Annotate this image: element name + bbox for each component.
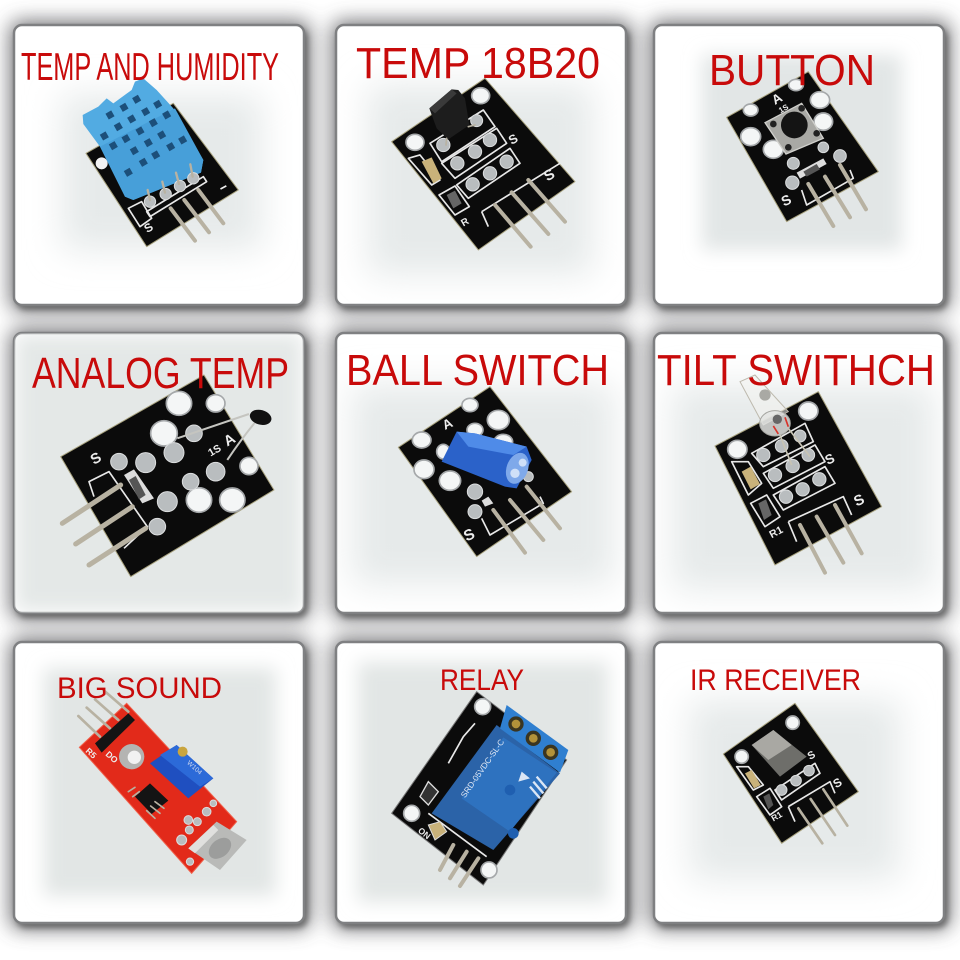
- panel: ball switch: [336, 333, 626, 613]
- module: 18B20 board: S: [541, 166, 558, 185]
- module: IR receiver board: S: [830, 775, 844, 791]
- panel: IR receiver: [654, 642, 944, 923]
- label: temp and humidity: TEMP AND HUMIDITY: [21, 46, 279, 89]
- module: ball switch board: A: [440, 415, 455, 433]
- panel: temp 18B20: [336, 25, 626, 305]
- module: mercury tilt board: S: [852, 492, 867, 510]
- module: IR receiver board: R1: [769, 809, 784, 823]
- panel: big sound: [14, 642, 304, 923]
- module: 18B20 board: R: [459, 216, 471, 229]
- module: IR receiver board: [723, 703, 858, 843]
- module: thermistor board: [61, 375, 274, 577]
- module: ball switch board: S: [461, 526, 478, 545]
- label: temp 18B20: TEMP 18B20: [356, 39, 600, 88]
- module: mercury tilt board: [715, 375, 882, 573]
- module: push button board: 1S: [777, 102, 791, 115]
- panel: relay: [336, 642, 626, 923]
- label: analog temp: ANALOG TEMP: [32, 349, 289, 398]
- module: thermistor board: S: [88, 450, 105, 468]
- label: big sound: BIG SOUND: [57, 672, 222, 705]
- module: relay board: SRD-05VDC-SL-C: [458, 737, 506, 799]
- panel: temp and humidity: [14, 25, 304, 305]
- label: IR receiver: IR RECEIVER: [690, 664, 861, 697]
- module: red sound sensor: DO: [104, 749, 120, 765]
- module: push button board: A: [769, 90, 785, 108]
- module: IR receiver board: S: [805, 749, 818, 763]
- module: DHT11 sensor: [83, 78, 238, 247]
- module: mercury tilt board: R1: [767, 524, 785, 541]
- module: relay board: ON: [416, 825, 432, 841]
- module: thermistor board: A: [221, 431, 239, 450]
- module: 18B20 board: S: [506, 131, 520, 148]
- module: red sound sensor: R5: [84, 746, 99, 761]
- label: relay: RELAY: [440, 664, 524, 697]
- label: ball switch: BALL SWITCH: [346, 346, 609, 395]
- panel: analog temp: [14, 333, 304, 613]
- panel: button: [654, 25, 944, 305]
- module: relay board: [392, 692, 568, 886]
- module: DHT11 sensor: S: [141, 220, 156, 236]
- module: ball switch board: [398, 387, 572, 557]
- module: red sound sensor: W104: [185, 760, 203, 777]
- label: button: BUTTON: [709, 46, 875, 95]
- module: push button board: S: [778, 191, 794, 209]
- label: tilt switch: TILT SWITHCH: [657, 346, 935, 395]
- module: push button board: [727, 72, 878, 226]
- module: red sound sensor: [78, 690, 247, 873]
- module: thermistor board: 1S: [206, 442, 223, 459]
- panel: tilt switch: [654, 333, 944, 613]
- module: mercury tilt board: S: [823, 450, 837, 468]
- module: 18B20 board: [392, 78, 575, 250]
